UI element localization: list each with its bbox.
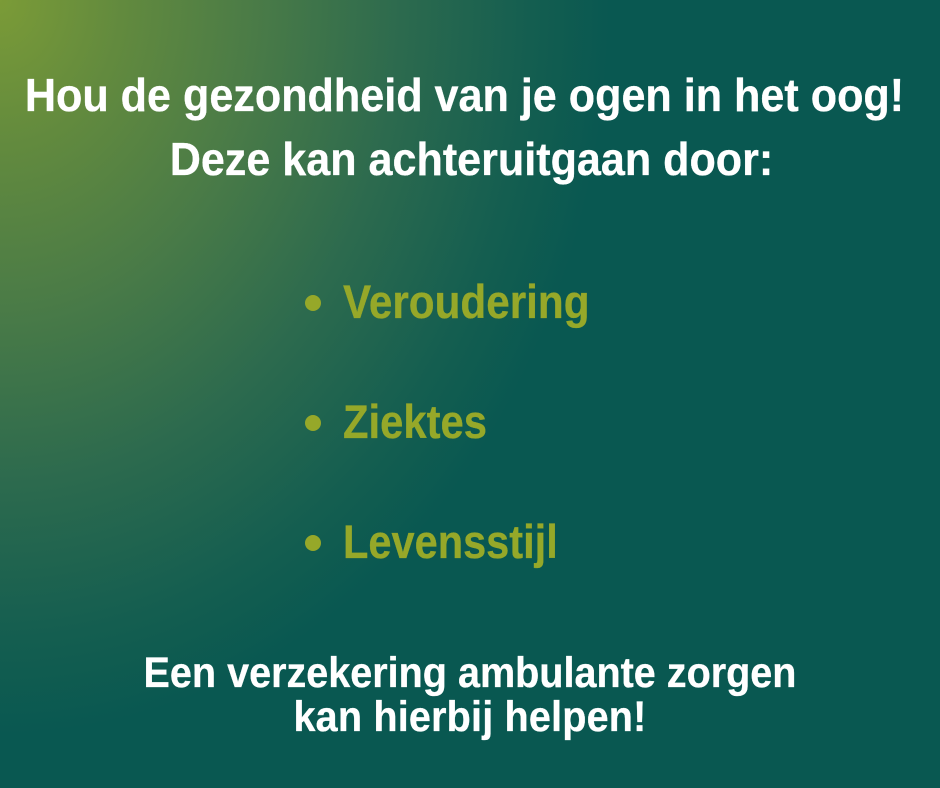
closing text: kan hierbij helpen! xyxy=(293,693,647,741)
title line 1: Hou de gezondheid van je ogen in het oog! xyxy=(25,69,904,121)
bullet: Levensstijl xyxy=(305,535,321,551)
bullet: Veroudering xyxy=(305,295,321,311)
bullet: Ziektes xyxy=(305,415,321,431)
item: Ziektes: Ziektes xyxy=(343,395,487,448)
closing text: Een verzekering ambulante zorgen xyxy=(144,649,796,697)
item: Veroudering: Veroudering xyxy=(343,275,590,328)
item: Levensstijl: Levensstijl xyxy=(343,515,558,568)
closing text xyxy=(144,649,796,741)
title line 2: Deze kan achteruitgaan door: xyxy=(170,133,773,185)
bullet list xyxy=(305,275,590,568)
